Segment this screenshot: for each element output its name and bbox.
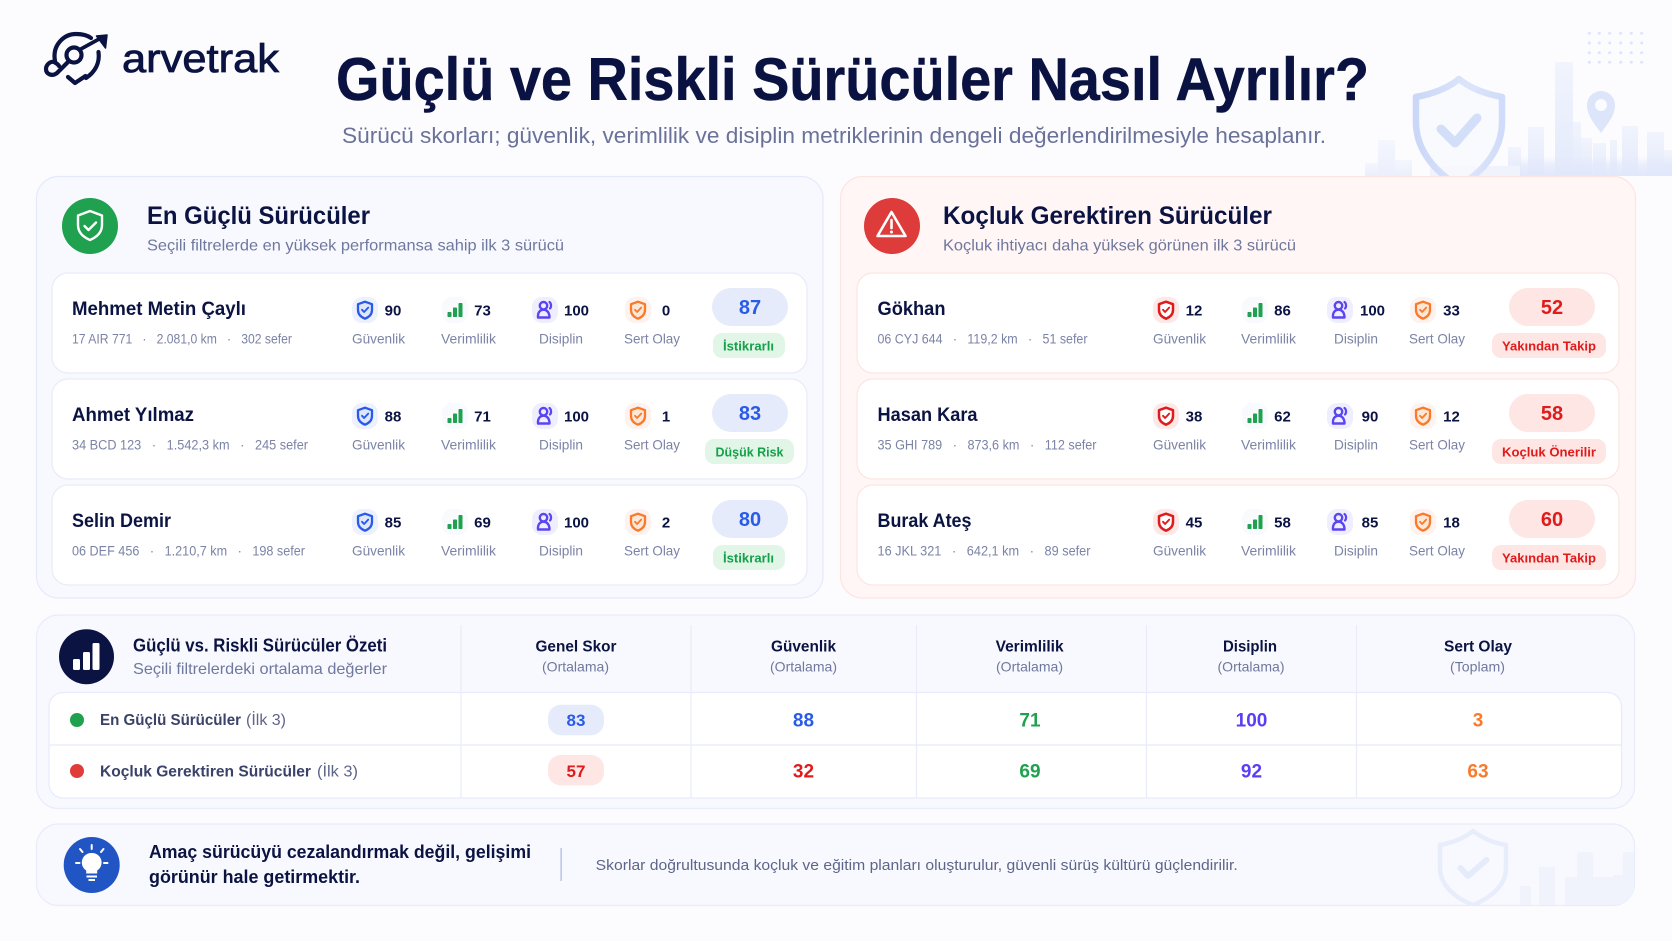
driver details: 16 JKL 321 · 642,1 km · 89 sefer bbox=[878, 544, 1091, 558]
column header: Disiplin bbox=[1218, 639, 1284, 675]
score badge: 87 bbox=[739, 297, 761, 319]
score badge bbox=[712, 288, 788, 326]
score badge bbox=[712, 500, 788, 538]
metric: Güvenlik: Güvenlik bbox=[352, 542, 406, 558]
metric: Verimlilik: Verimlilik bbox=[1241, 542, 1297, 558]
panel heading: Koçluk Gerektiren Sürücüler bbox=[943, 202, 1272, 230]
metric: Sert Olay: Sert Olay bbox=[1409, 436, 1465, 452]
metric: Güvenlik bbox=[1153, 509, 1207, 558]
status badge bbox=[713, 545, 785, 570]
metric: Sert Olay: Sert Olay bbox=[1409, 330, 1465, 346]
table row: En Güçlü Sürücüler: 3 bbox=[1473, 711, 1483, 732]
metric: Güvenlik: 88 bbox=[385, 408, 401, 426]
driver row: Mehmet Metin Çaylı bbox=[52, 273, 807, 373]
panel subheading: Seçili filtrelerde en yüksek performansa sahip ilk 3 sürücü bbox=[147, 238, 564, 254]
table row: En Güçlü Sürücüler: 100 bbox=[1236, 711, 1267, 732]
metric: Disiplin: Disiplin bbox=[539, 436, 583, 452]
metric: Verimlilik: 62 bbox=[1274, 408, 1291, 426]
panel: En Güçlü Sürücüler bbox=[36, 176, 823, 598]
metric: Sert Olay bbox=[624, 403, 680, 452]
status badge bbox=[713, 333, 785, 358]
metric: Güvenlik bbox=[352, 509, 406, 558]
metric: Sert Olay: Sert Olay bbox=[624, 436, 680, 452]
metric: Sert Olay bbox=[1409, 403, 1465, 452]
driver name: Burak Ateş bbox=[878, 511, 972, 532]
metric: Sert Olay: 18 bbox=[1443, 514, 1460, 532]
driver name: Gökhan bbox=[878, 299, 946, 320]
metric: Güvenlik: Güvenlik bbox=[352, 436, 406, 452]
metric: Sert Olay: 2 bbox=[662, 514, 670, 532]
icon: green shield bbox=[62, 198, 118, 254]
driver details: 34 BCD 123 · 1.542,3 km · 245 sefer bbox=[72, 438, 308, 452]
summary subtitle: Seçili filtrelerdeki ortalama değerler bbox=[133, 661, 388, 678]
metric: Verimlilik bbox=[441, 297, 497, 346]
driver row: Gökhan bbox=[857, 273, 1619, 373]
score badge bbox=[1509, 288, 1595, 326]
logo mark bbox=[46, 34, 107, 83]
metric: Disiplin: 100 bbox=[564, 408, 589, 426]
metric: Verimlilik: 73 bbox=[474, 302, 491, 320]
metric: Disiplin: 85 bbox=[1362, 514, 1378, 532]
metric: Sert Olay: Sert Olay bbox=[624, 330, 680, 346]
table row: Koçluk Gerektiren Sürücüler: 63 bbox=[1467, 762, 1489, 782]
table row: Koçluk Gerektiren Sürücüler: 92 bbox=[1241, 762, 1262, 782]
metric: Güvenlik: 90 bbox=[385, 302, 401, 320]
table row: Koçluk Gerektiren Sürücüler: 32 bbox=[793, 762, 814, 782]
table row: En Güçlü Sürücüler: 71 bbox=[1019, 711, 1041, 732]
icon: light bulb bbox=[64, 837, 120, 893]
metric: Verimlilik bbox=[441, 509, 497, 558]
score badge: 60 bbox=[1541, 509, 1563, 531]
metric: Sert Olay: Sert Olay bbox=[624, 542, 680, 558]
table row: Koçluk Gerektiren Sürücüler: (İlk 3) bbox=[317, 762, 358, 781]
metric: Verimlilik: Verimlilik bbox=[441, 542, 497, 558]
metric: Verimlilik: Verimlilik bbox=[441, 436, 497, 452]
status badge bbox=[1492, 545, 1606, 570]
metric: Verimlilik: Verimlilik bbox=[1241, 436, 1297, 452]
metric: Disiplin: Disiplin bbox=[1334, 436, 1378, 452]
column header: Güvenlik: Güvenlik bbox=[771, 639, 836, 656]
metric: Verimlilik bbox=[1241, 509, 1297, 558]
column header: Disiplin: (Ortalama) bbox=[1218, 659, 1284, 675]
summary title: Güçlü vs. Riskli Sürücüler Özeti bbox=[133, 636, 387, 656]
metric: Disiplin bbox=[1327, 297, 1385, 346]
column header: Genel Skor: Genel Skor bbox=[536, 639, 616, 656]
metric: Verimlilik: Verimlilik bbox=[1241, 330, 1297, 346]
driver name: Hasan Kara bbox=[878, 405, 978, 426]
column header: Verimlilik: (Ortalama) bbox=[996, 659, 1063, 675]
metric: Disiplin: 100 bbox=[564, 302, 589, 320]
decoration: city skyline and shield bbox=[1365, 32, 1672, 186]
status badge: İstikrarlı bbox=[723, 550, 774, 566]
status badge: Düşük Risk bbox=[716, 444, 784, 460]
banner description: Skorlar doğrultusunda koçluk ve eğitim planları oluşturulur, güvenli sürüş kültürü güçlendirilir. bbox=[596, 857, 1238, 874]
status badge: İstikrarlı bbox=[723, 338, 774, 354]
status badge: Koçluk Önerilir bbox=[1502, 444, 1596, 460]
metric: Sert Olay bbox=[1409, 297, 1465, 346]
column header: Sert Olay bbox=[1444, 639, 1512, 675]
score badge bbox=[1509, 394, 1595, 432]
status badge bbox=[705, 439, 794, 464]
score badge: 80 bbox=[739, 509, 761, 531]
metric: Güvenlik: Güvenlik bbox=[1153, 330, 1207, 346]
metric: Verimlilik: 86 bbox=[1274, 302, 1291, 320]
metric: Disiplin bbox=[532, 509, 589, 558]
metric: Güvenlik: Güvenlik bbox=[1153, 436, 1207, 452]
metric: Sert Olay bbox=[624, 297, 680, 346]
metric: Verimlilik: 58 bbox=[1274, 514, 1291, 532]
table row: Koçluk Gerektiren Sürücüler bbox=[70, 755, 1489, 786]
table row: Koçluk Gerektiren Sürücüler: Koçluk Gerektiren Sürücüler bbox=[100, 764, 311, 781]
column header: Verimlilik: Verimlilik bbox=[996, 639, 1064, 656]
status badge: Yakından Takip bbox=[1502, 550, 1596, 566]
metric: Güvenlik bbox=[352, 403, 406, 452]
metric: Disiplin: 90 bbox=[1362, 408, 1378, 426]
metric: Sert Olay: 0 bbox=[662, 302, 670, 320]
metric: Sert Olay: 12 bbox=[1443, 408, 1460, 426]
driver name: Mehmet Metin Çaylı bbox=[72, 299, 246, 320]
icon: bar chart bbox=[59, 629, 114, 684]
driver details: 17 AIR 771 · 2.081,0 km · 302 sefer bbox=[72, 332, 292, 346]
metric: Sert Olay: 33 bbox=[1443, 302, 1460, 320]
metric: Sert Olay: 1 bbox=[662, 408, 670, 426]
banner headline: görünür hale getirmektir. bbox=[149, 866, 360, 887]
metric: Verimlilik: 69 bbox=[474, 514, 491, 532]
panel heading: En Güçlü Sürücüler bbox=[147, 202, 370, 230]
column header: Sert Olay: Sert Olay bbox=[1444, 639, 1512, 656]
metric: Güvenlik bbox=[1153, 297, 1207, 346]
banner: purpose statement bbox=[36, 824, 1634, 906]
driver row: Hasan Kara bbox=[857, 379, 1619, 479]
banner headline: Amaç sürücüyü cezalandırmak değil, gelişimi bbox=[149, 841, 531, 862]
panel: Koçluk Gerektiren Sürücüler bbox=[840, 176, 1636, 598]
metric: Sert Olay bbox=[1409, 509, 1465, 558]
status badge bbox=[1492, 333, 1606, 358]
metric: Güvenlik: 45 bbox=[1186, 514, 1202, 532]
metric: Disiplin: Disiplin bbox=[1334, 542, 1378, 558]
metric: Disiplin bbox=[532, 297, 589, 346]
metric: Disiplin: Disiplin bbox=[539, 330, 583, 346]
table row: En Güçlü Sürücüler bbox=[70, 705, 1483, 735]
driver details: 06 DEF 456 · 1.210,7 km · 198 sefer bbox=[72, 544, 305, 558]
logo: arvetrak bbox=[46, 34, 280, 83]
metric: Güvenlik: 38 bbox=[1186, 408, 1202, 426]
metric: Verimlilik: 71 bbox=[474, 408, 491, 426]
metric: Disiplin: 100 bbox=[564, 514, 589, 532]
column header: Güvenlik bbox=[770, 639, 837, 675]
driver details: 35 GHI 789 · 873,6 km · 112 sefer bbox=[878, 438, 1097, 452]
column header: Verimlilik bbox=[996, 639, 1064, 675]
driver row: Selin Demir bbox=[52, 485, 807, 585]
score badge bbox=[1509, 500, 1595, 538]
title: Güçlü ve Riskli Sürücüler Nasıl Ayrılır? bbox=[336, 46, 1369, 113]
column header: Sert Olay: (Toplam) bbox=[1450, 659, 1505, 675]
status badge bbox=[1492, 439, 1606, 464]
banner divider bbox=[560, 848, 562, 881]
metric: Verimlilik bbox=[1241, 403, 1297, 452]
panel subheading: Koçluk ihtiyacı daha yüksek görünen ilk 3 sürücü bbox=[943, 238, 1296, 254]
metric: Disiplin bbox=[1327, 403, 1378, 452]
metric: Güvenlik: Güvenlik bbox=[352, 330, 406, 346]
decoration: banner shield and skyline bbox=[1440, 831, 1634, 905]
table row: En Güçlü Sürücüler: 83 bbox=[567, 711, 585, 730]
metric: Disiplin: Disiplin bbox=[1334, 330, 1378, 346]
metric: Güvenlik: Güvenlik bbox=[1153, 542, 1207, 558]
score badge: 83 bbox=[739, 403, 761, 425]
table row: Koçluk Gerektiren Sürücüler: 57 bbox=[567, 762, 585, 781]
column header: Genel Skor: (Ortalama) bbox=[542, 659, 609, 675]
metric: Disiplin: 100 bbox=[1360, 302, 1385, 320]
driver details: 06 CYJ 644 · 119,2 km · 51 sefer bbox=[878, 332, 1088, 346]
score badge: 58 bbox=[1541, 403, 1563, 425]
metric: Güvenlik: 85 bbox=[385, 514, 401, 532]
metric: Disiplin: Disiplin bbox=[539, 542, 583, 558]
table row: En Güçlü Sürücüler: En Güçlü Sürücüler bbox=[100, 712, 241, 729]
metric: Güvenlik bbox=[352, 297, 406, 346]
driver row: Ahmet Yılmaz bbox=[52, 379, 807, 479]
metric: Verimlilik bbox=[1241, 297, 1297, 346]
metric: Verimlilik bbox=[441, 403, 497, 452]
table row: Koçluk Gerektiren Sürücüler: 69 bbox=[1019, 762, 1041, 782]
column header: Disiplin: Disiplin bbox=[1223, 639, 1277, 656]
score badge bbox=[712, 394, 788, 432]
driver name: Ahmet Yılmaz bbox=[72, 405, 194, 426]
metric: Verimlilik: Verimlilik bbox=[441, 330, 497, 346]
icon: red warning triangle bbox=[864, 198, 920, 254]
table row: En Güçlü Sürücüler: 88 bbox=[793, 711, 814, 732]
panel: summary comparison table bbox=[36, 615, 1634, 808]
subtitle: Sürücü skorları; güvenlik, verimlilik ve disiplin metriklerinin dengeli değerlendirilmesiyle hesaplanır. bbox=[342, 123, 1326, 148]
status badge: Yakından Takip bbox=[1502, 338, 1596, 354]
table row: En Güçlü Sürücüler: (İlk 3) bbox=[246, 710, 286, 729]
metric: Sert Olay: Sert Olay bbox=[1409, 542, 1465, 558]
logo wordmark: arvetrak bbox=[122, 37, 280, 81]
driver name: Selin Demir bbox=[72, 511, 172, 532]
metric: Disiplin bbox=[532, 403, 589, 452]
driver row: Burak Ateş bbox=[857, 485, 1619, 585]
score badge: 52 bbox=[1541, 297, 1563, 319]
metric: Sert Olay bbox=[624, 509, 680, 558]
metric: Güvenlik bbox=[1153, 403, 1207, 452]
column header: Güvenlik: (Ortalama) bbox=[770, 659, 837, 675]
metric: Disiplin bbox=[1327, 509, 1378, 558]
column header: Genel Skor bbox=[536, 639, 616, 675]
metric: Güvenlik: 12 bbox=[1186, 302, 1202, 320]
